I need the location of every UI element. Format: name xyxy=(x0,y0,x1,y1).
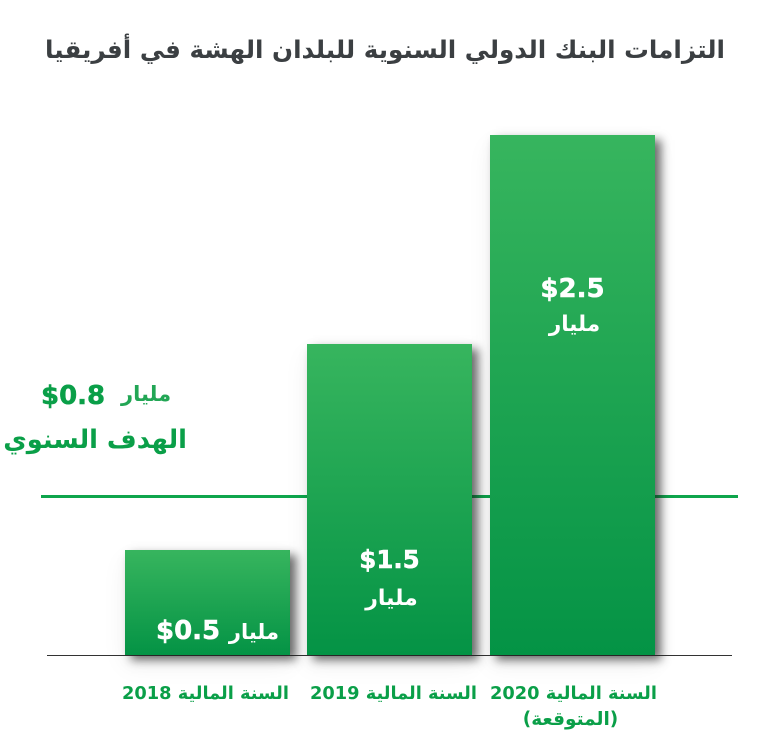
title: التزامات البنك الدولي السنوية للبلدان الهشة في أفريقيا xyxy=(45,35,725,64)
axis label 2019: السنة المالية 2019 xyxy=(310,683,477,704)
bar: 2019 xyxy=(307,344,472,655)
amount: $1.5 xyxy=(359,545,420,574)
annual target line xyxy=(41,495,738,498)
label line 1: السنة المالية 2020 xyxy=(490,683,657,704)
label line 2: (المتوقعة) xyxy=(523,709,618,730)
target caption: الهدف السنوي xyxy=(3,425,187,455)
target amount: $0.8 xyxy=(41,381,105,411)
target unit: مليار xyxy=(121,382,171,406)
bar: 2018 xyxy=(125,550,290,655)
amount: $0.5 xyxy=(156,616,220,646)
amount: $2.5 xyxy=(540,274,605,304)
axis label 2020 xyxy=(490,683,657,730)
bar: 2020 xyxy=(490,135,655,655)
unit: مليار xyxy=(549,312,600,337)
axis label 2018: السنة المالية 2018 xyxy=(122,683,289,704)
unit: مليار xyxy=(229,620,279,644)
baseline axis xyxy=(47,655,732,656)
annual target label xyxy=(3,381,187,455)
value label 2018 xyxy=(156,616,279,646)
value label 2020 xyxy=(540,274,605,337)
value label 2019 xyxy=(359,545,420,611)
unit: مليار xyxy=(365,586,418,611)
